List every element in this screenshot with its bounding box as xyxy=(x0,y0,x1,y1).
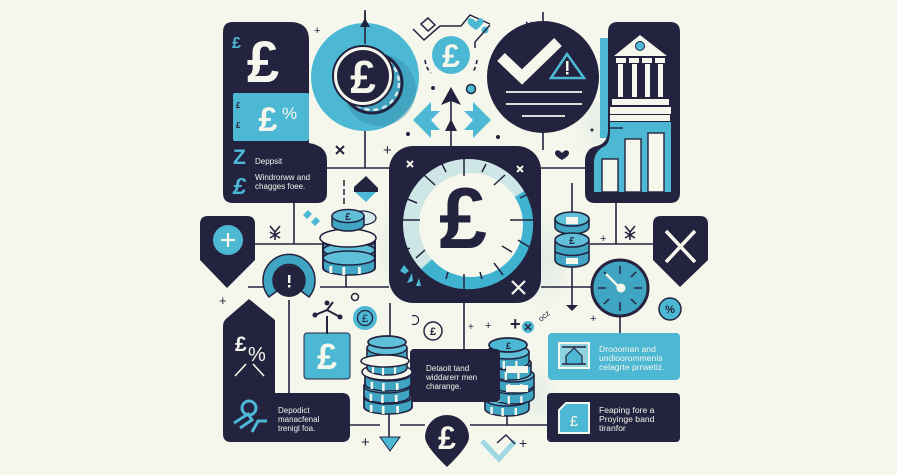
icon: pound percent: £ xyxy=(235,333,247,356)
coin stack: upper left: £ xyxy=(345,212,351,223)
blue percent card: £ xyxy=(236,121,241,130)
icon: small pound coins: £ xyxy=(430,326,436,338)
panel text: Deppsit xyxy=(255,157,283,166)
icon: small pound coins: £ xyxy=(362,313,368,325)
icon: pound percent xyxy=(235,333,266,376)
large pound sign: £ xyxy=(439,171,487,267)
panel: bank and chart xyxy=(585,22,680,203)
panel: dark property text: tiranfor xyxy=(599,423,626,433)
panel: deposit and withdrawal: chagges foee. xyxy=(255,182,305,191)
icon: pound mark: £ xyxy=(232,173,247,199)
small decorative symbols: ocz xyxy=(537,309,552,324)
coin stack: upper left xyxy=(320,210,376,275)
icon: pound location pin: £ xyxy=(438,420,456,456)
panel: fee card with house shape: Depodict xyxy=(278,406,310,415)
panel: middle text: charange. xyxy=(426,382,462,391)
panel: middle text xyxy=(410,349,500,402)
icon: coin in blue circle xyxy=(311,10,419,131)
panel: middle text: widdarerr men xyxy=(425,373,477,382)
panel: fee card with house shape: trenigl foa. xyxy=(278,424,315,433)
coin stack: lower right: £ xyxy=(506,341,511,351)
arrows: centre direction group xyxy=(406,84,491,138)
panel: fee card with house shape xyxy=(223,299,350,442)
icon: right clock xyxy=(592,260,648,316)
icon: small pound: £ xyxy=(232,35,241,52)
small decorative symbols: + xyxy=(600,233,606,245)
coin stack: upper right: £ xyxy=(569,236,575,247)
bank building xyxy=(610,35,671,121)
panel: dark property text: Proyinge band xyxy=(599,414,655,424)
panel: dark property text: Feaping fore a xyxy=(599,405,655,415)
blue percent card: £ xyxy=(236,101,241,110)
icon: blue pound card xyxy=(304,300,350,379)
small decorative symbols: + xyxy=(485,320,491,332)
icon: coin in blue circle: £ xyxy=(350,51,376,103)
icon: blue pound figure xyxy=(234,401,267,432)
panel: central pound clock xyxy=(389,146,541,303)
icon: pound location pin xyxy=(425,415,469,467)
icon: bottom triangle xyxy=(380,437,400,451)
icon: warning gauge xyxy=(263,254,315,297)
icon: pound badge with heart xyxy=(413,15,490,74)
panel: middle text: Detaoit tand xyxy=(426,364,469,373)
icon: top triangle marker xyxy=(344,176,378,206)
panel: blue house text: celagrte prrwetiz. xyxy=(599,362,664,372)
icon: check and warning circle xyxy=(487,21,599,133)
icon: percent badge xyxy=(659,298,681,320)
icon: pound document: £ xyxy=(570,413,579,430)
blue percent card: £ xyxy=(259,101,278,139)
panel: deposit and withdrawal: Windrorww and xyxy=(255,173,310,182)
large pound sign: £ xyxy=(247,30,279,95)
small decorative symbols: + xyxy=(219,293,227,308)
coin stack: lower right xyxy=(485,338,534,416)
bar chart xyxy=(594,122,671,192)
panel: blue house text: undioorommenis xyxy=(599,353,663,363)
small decorative symbols: + xyxy=(519,435,527,451)
panel: blue house text xyxy=(548,333,680,380)
small decorative symbols xyxy=(219,22,635,451)
small decorative symbols: + xyxy=(510,314,521,334)
small decorative symbols: + xyxy=(590,313,596,325)
small decorative symbols: + xyxy=(468,322,474,333)
coin stack: lower left xyxy=(361,336,412,414)
blue percent card xyxy=(233,93,309,141)
icon: right shield with cross xyxy=(653,216,708,287)
panel: fee card with house shape: manacfenal xyxy=(278,415,320,424)
panel: dark property text xyxy=(547,393,680,442)
small decorative symbols: + xyxy=(383,142,392,159)
panel: blue house text: Droooman and xyxy=(599,344,656,354)
icon: pound percent: % xyxy=(248,344,266,366)
icon: pound badge with heart: £ xyxy=(442,38,460,74)
soft shadows xyxy=(370,85,630,430)
icon: corner sparkles xyxy=(400,161,525,294)
icon: house xyxy=(559,343,589,368)
icon: check chevron xyxy=(482,435,515,459)
blue percent card: % xyxy=(282,104,297,123)
small decorative symbols: + xyxy=(361,434,370,451)
coin stack: upper right xyxy=(555,212,589,311)
icon: left shield with plus xyxy=(200,216,255,288)
icon: percent badge: % xyxy=(665,304,675,316)
icon: Z mark: Z xyxy=(233,146,246,169)
panel: deposit and withdrawal xyxy=(223,22,327,203)
icon: blue pound card: £ xyxy=(317,336,337,377)
connector lines xyxy=(248,12,653,438)
icon: small pound coins xyxy=(352,294,442,340)
small decorative symbols: + xyxy=(314,25,320,37)
